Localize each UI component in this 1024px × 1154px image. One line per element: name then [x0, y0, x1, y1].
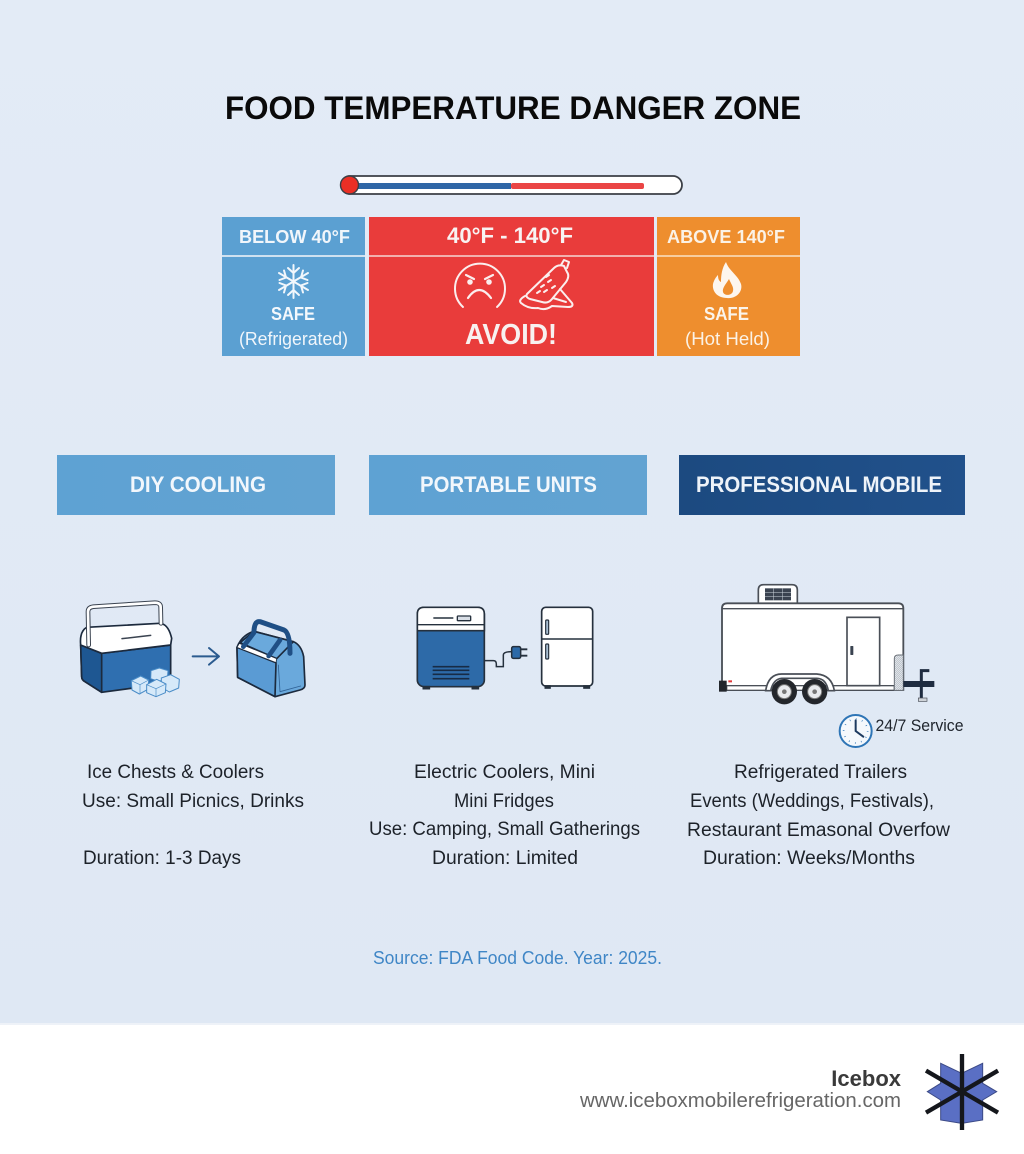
- text block: portable units details: [369, 762, 640, 869]
- panel: below 40F safe: BELOW 40°F: [239, 227, 350, 247]
- icon: Icebox logo: [926, 1054, 998, 1130]
- icon: power cord and plug: [484, 647, 527, 667]
- icon: cooler bag: [237, 622, 305, 697]
- icon: ice cooler: [80, 603, 172, 692]
- thermometer: [340, 176, 682, 194]
- arrow: [193, 648, 219, 665]
- website: www.iceboxmobilerefrigeration.com: [579, 1090, 901, 1112]
- category header: professional mobile: PROFESSIONAL MOBILE: [696, 472, 942, 497]
- footer: [0, 1023, 1024, 1154]
- icon: refrigerated trailer: [719, 585, 934, 704]
- icon: mini fridge: [542, 607, 593, 688]
- title: FOOD TEMPERATURE DANGER ZONE: [225, 90, 801, 126]
- icon: flame: [713, 262, 741, 298]
- text block: portable units details: Duration: Limited: [432, 848, 578, 869]
- panel: below 40F safe: SAFE: [271, 304, 315, 324]
- text block: portable units details: Electric Coolers, Mini: [414, 762, 595, 783]
- text block: DIY cooling details: Ice Chests & Coolers: [87, 762, 264, 783]
- text block: professional mobile details: Duration: Weeks/Months: [703, 848, 915, 869]
- panel: below 40F safe: [222, 217, 365, 356]
- panel: 40F to 140F avoid: [369, 217, 654, 356]
- text block: professional mobile details: Refrigerated Trailers: [734, 762, 907, 783]
- icon: electric cooler: [417, 607, 484, 689]
- icon: clock: [840, 715, 872, 747]
- panel: above 140F safe: ABOVE 140°F: [667, 227, 785, 247]
- category header: DIY cooling: DIY COOLING: [130, 472, 266, 497]
- icon: portable electric cooler and mini fridge: [417, 607, 593, 689]
- service label: 24/7 Service: [876, 716, 964, 735]
- panel: above 140F safe: [657, 217, 800, 356]
- text block: portable units details: Use: Camping, Small Gatherings: [369, 819, 640, 840]
- icon: spoiled food: [520, 260, 572, 309]
- panel: above 140F safe: (Hot Held): [685, 329, 770, 349]
- panel: above 140F safe: SAFE: [704, 304, 749, 324]
- icon: snowflake: [279, 265, 308, 298]
- icon: roof cooling unit: [758, 585, 797, 603]
- category header: portable units: PORTABLE UNITS: [420, 472, 597, 497]
- panel: 40F to 140F avoid: AVOID!: [465, 319, 557, 351]
- text block: professional mobile details: [687, 762, 950, 869]
- brand name: Icebox: [831, 1066, 902, 1091]
- text block: professional mobile details: Restaurant Emasonal Overfow: [687, 820, 950, 841]
- panel: below 40F safe: (Refrigerated): [239, 329, 348, 349]
- category header: portable units: [369, 455, 647, 515]
- text block: DIY cooling details: Duration: 1-3 Days: [83, 848, 241, 869]
- category header: professional mobile: [679, 455, 965, 515]
- icon: ice cubes: [131, 668, 179, 697]
- panel: 40F to 140F avoid: 40°F - 140°F: [447, 223, 573, 248]
- icon: sad face: [455, 264, 505, 307]
- text block: DIY cooling details: Use: Small Picnics, Drinks: [82, 791, 304, 812]
- text block: DIY cooling details: [82, 762, 304, 869]
- icon: trailer wheels: [772, 679, 827, 704]
- category header: DIY cooling: [57, 455, 335, 515]
- source: Source: FDA Food Code. Year: 2025.: [373, 948, 662, 968]
- text block: professional mobile details: Events (Weddings, Festivals),: [690, 791, 934, 812]
- icon: hitch and jack: [903, 671, 934, 701]
- text block: portable units details: Mini Fridges: [454, 791, 554, 812]
- icon: cooler, arrow and insulated bag: [80, 603, 305, 697]
